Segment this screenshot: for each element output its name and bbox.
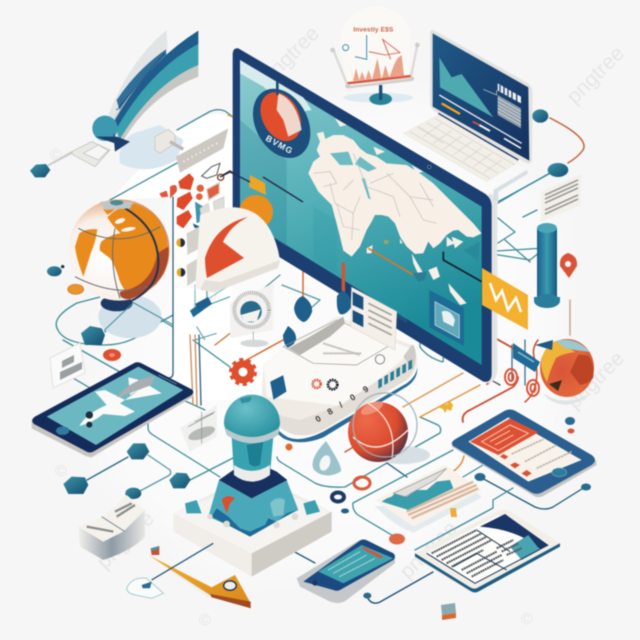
hex nodes: [532, 109, 548, 123]
laptop chart: [439, 57, 493, 117]
plane on router: [288, 317, 345, 355]
router vent bars: [378, 360, 412, 389]
globe shadow: [98, 295, 162, 338]
joystick: [173, 395, 332, 577]
red dial: [195, 195, 280, 292]
teal triangle marker: [463, 242, 480, 262]
laptop base front: [493, 170, 528, 202]
router info card: [351, 287, 397, 350]
navy collar: [219, 460, 287, 498]
watermark: pngtree: [562, 42, 629, 109]
presentation board: [330, 6, 420, 105]
fingerprint device: [230, 283, 273, 347]
right globe: [535, 339, 594, 434]
watermark: ©: [521, 611, 533, 628]
laptop keyboard: [403, 115, 518, 182]
plane on phone: [79, 377, 162, 426]
white plate: [173, 473, 332, 577]
globe sphere: [68, 199, 170, 301]
dark wire: [220, 172, 303, 202]
screen highlight: [240, 60, 312, 113]
left phone: [32, 362, 193, 457]
note card left: [50, 343, 85, 388]
watermark: pngtree: [245, 497, 312, 564]
icons panel: [159, 163, 238, 340]
small blue card: [513, 343, 540, 372]
monitor side: [487, 193, 497, 383]
monitor frame: [233, 48, 492, 382]
arrowhead pointer: [148, 543, 252, 608]
watermark: pngtree: [257, 22, 324, 89]
red ball: [348, 393, 430, 464]
board chart: [348, 55, 404, 81]
connector plate: [155, 129, 175, 153]
board title: Investiy E$S: [353, 27, 394, 34]
yellow tag: [249, 175, 266, 195]
dish frame: [72, 142, 110, 167]
bottom small block: [441, 603, 456, 620]
watermark: pngtree: [395, 517, 462, 584]
watermark: ©: [55, 463, 67, 480]
globe stand: [101, 295, 133, 311]
large tablet: [452, 409, 597, 497]
coin: [68, 284, 84, 294]
screen: [240, 60, 482, 365]
watermark: ©: [205, 287, 217, 304]
watermark: ©: [50, 147, 62, 164]
hex node: [81, 326, 105, 345]
left globe: [47, 199, 173, 345]
sketch card: [180, 405, 217, 452]
camera dot: [428, 165, 431, 169]
router base edge: [267, 363, 417, 442]
pin markers: [195, 290, 352, 350]
watermark: pngtree: [562, 347, 629, 414]
watermark: ©: [199, 612, 211, 629]
hex nodes: [63, 443, 191, 499]
chart card: [375, 465, 482, 533]
document top right: [541, 174, 581, 222]
small node: [47, 266, 62, 276]
small phone: [297, 539, 395, 603]
map badge: BVMG: [264, 133, 295, 156]
router button: [270, 375, 287, 400]
white router: [262, 317, 417, 442]
stem: [232, 437, 273, 482]
connecting wires: [40, 110, 585, 603]
red bar: [338, 263, 348, 297]
teal base: [208, 480, 298, 535]
map arrow: [368, 248, 413, 275]
gear icon: [231, 360, 255, 384]
yellow star: [437, 400, 453, 413]
map label: M: [384, 240, 389, 246]
orange and red wires: [215, 115, 584, 472]
dome: [224, 395, 280, 440]
router body: [262, 317, 417, 435]
blue nodes lower right: [450, 473, 591, 517]
landmass: [308, 118, 482, 305]
gears: [313, 380, 321, 388]
top-left dish with ribbon: [30, 30, 228, 177]
ribbon: [108, 30, 198, 147]
dish sphere: [92, 116, 118, 141]
document tablet: [414, 510, 560, 592]
laptop lid: [430, 30, 533, 164]
map badge: [241, 79, 322, 168]
watermark: pngtree: [92, 507, 159, 574]
red coin: [103, 349, 121, 361]
world map monitor: [233, 48, 497, 383]
blue card on screen: [429, 290, 464, 346]
yellow chart card: [482, 268, 528, 330]
continents: [100, 204, 168, 297]
shield ring shape: [312, 441, 341, 476]
black arrow: [443, 252, 482, 282]
orange spiral nodes: [505, 369, 539, 396]
perforated strip: [176, 128, 228, 173]
map pin icon: [560, 253, 577, 278]
white platform background: [100, 90, 560, 580]
orange wire dot: [286, 444, 292, 450]
hex node: [30, 164, 50, 177]
right cylinder: [534, 223, 560, 308]
pale shadow under dish: [119, 125, 183, 169]
small spiral and rings: [332, 477, 405, 544]
laptop: [403, 30, 568, 202]
light bulb sketch: [127, 578, 163, 598]
router numbers: 08/09: [313, 384, 370, 424]
open book: [78, 495, 145, 560]
